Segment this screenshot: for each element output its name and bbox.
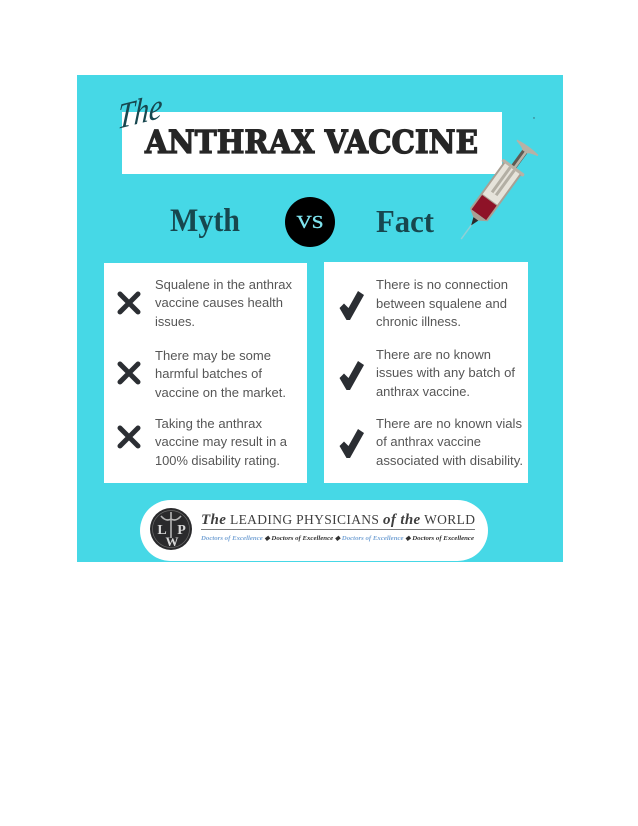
fact item 2: issues with any batch of [376,366,516,380]
logo emblem: LPW: L [157,523,167,538]
myth item 2: There may be some [155,349,271,363]
rule under organization name [201,529,475,530]
fact item 3: of anthrax vaccine [376,435,481,449]
tagline row: Doctors of Excellence ◆ Doctors of Excellence ◆ Doctors of Excellence ◆ Doctors of Excellence [200,535,474,542]
myth item 2 [120,349,286,400]
fact item 2: anthrax vaccine. [376,385,470,399]
script word: The: The [116,85,164,137]
logo emblem: LPW: W [166,534,178,549]
VS badge [285,197,335,247]
icon: syringe [450,139,539,247]
title: ANTHRAX VACCINE: ANTHRAX VACCINE [144,124,478,161]
fact item 1: There is no connection [376,278,508,292]
title banner [122,112,502,174]
myth item 2: vaccine on the market. [155,386,286,400]
heading: Myth: Myth [170,203,240,239]
myth item 2: harmful batches of [155,367,263,381]
myth item 1: Squalene in the anthrax [155,278,293,292]
myth item 1: vaccine causes health [155,296,283,310]
myth item 3: Taking the anthrax [155,417,263,431]
logo emblem: LPW: P [177,523,186,538]
myth item 1 [120,278,293,329]
panel: myth [104,263,307,483]
fact item 1: chronic illness. [376,315,461,329]
heading: Fact: Fact [376,203,434,239]
fact item 1 [340,278,508,329]
logo emblem: LPW [150,508,192,550]
infographic background [77,75,563,562]
organization name: The LEADING PHYSICIANS of the WORLD [201,512,475,528]
myth item 3: 100% disability rating. [155,454,280,468]
fact item 1: between squalene and [376,297,507,311]
myth item 1: issues. [155,315,195,329]
fact item 2: There are no known [376,348,491,362]
fact item 3: There are no known vials [376,417,522,431]
logo pill footer [140,500,488,561]
myth item 3: vaccine may result in a [155,435,287,449]
fact item 2 [340,348,516,399]
fact item 3 [340,417,523,468]
tiny speck [533,117,535,119]
myth item 3 [120,417,287,468]
fact item 3: associated with disability. [376,454,523,468]
panel: fact [324,262,528,483]
VS badge: VS [296,212,324,232]
